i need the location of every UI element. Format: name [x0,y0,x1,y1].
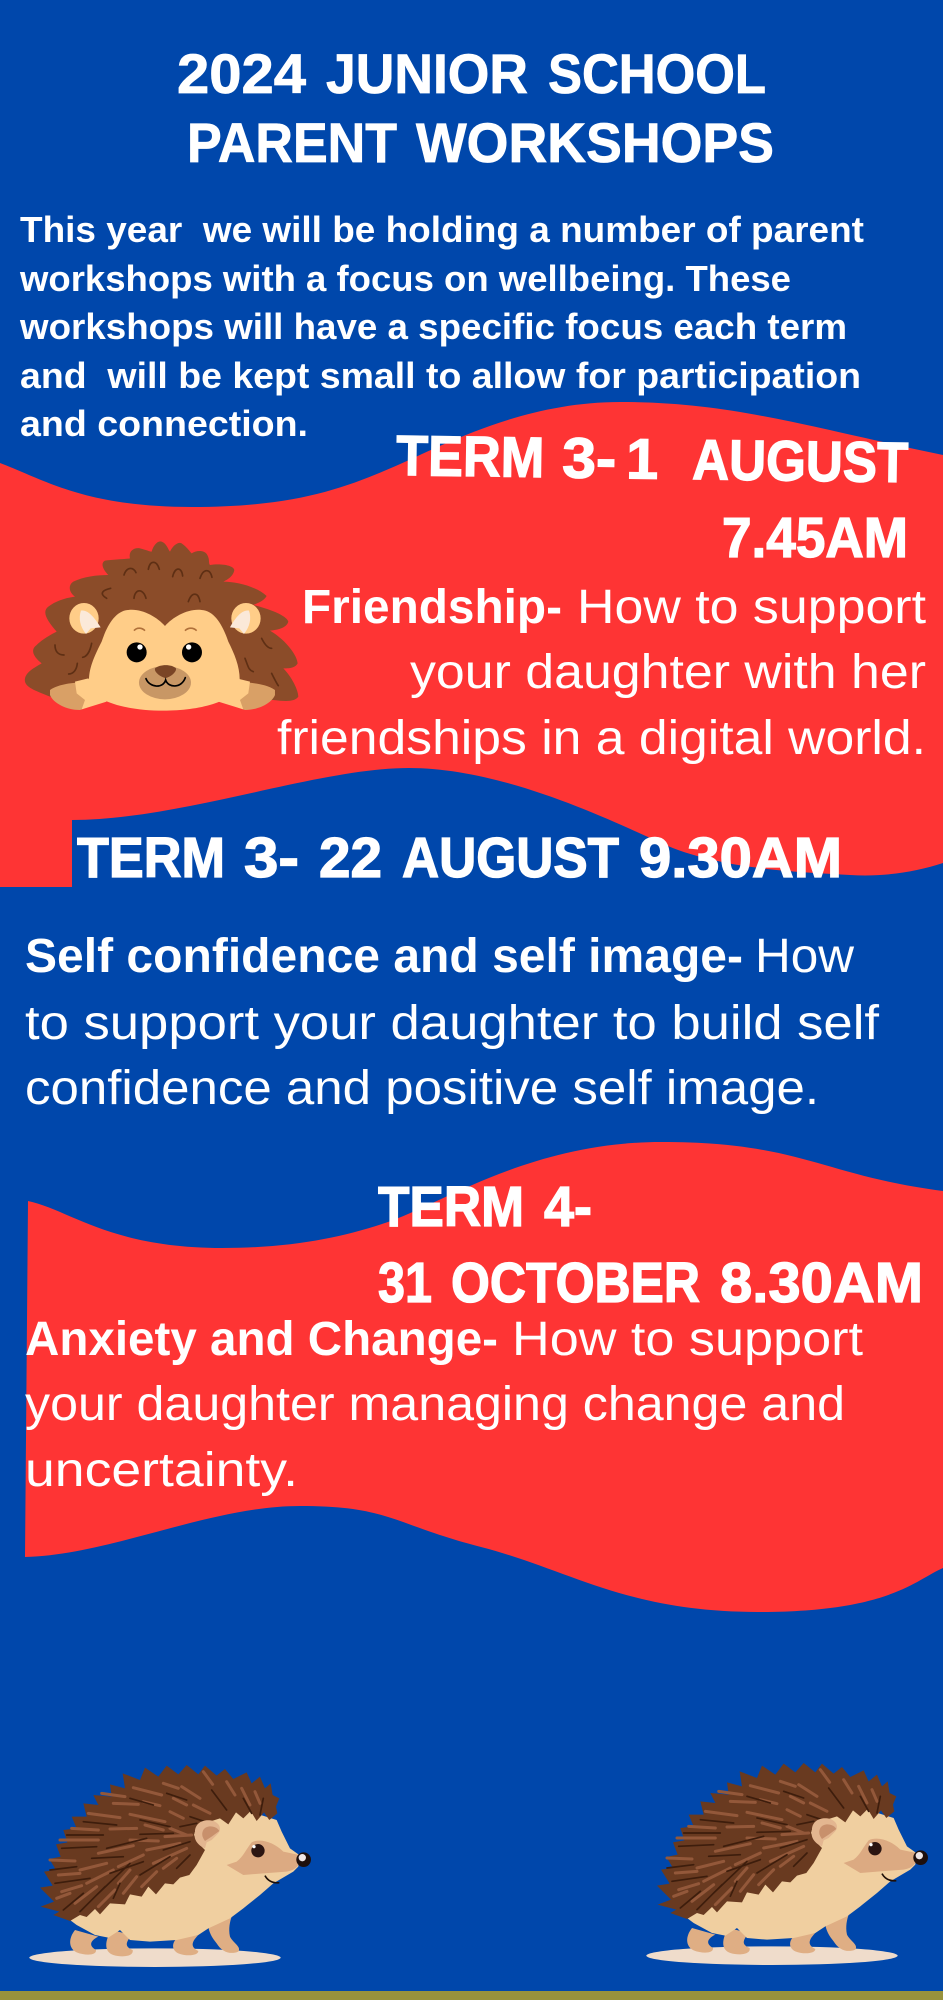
text: friendship workshop [277,581,926,765]
text: self confidence workshop: How [755,930,854,983]
heading: term 4, 31 October: 4- [544,1175,592,1239]
intro paragraph: This year we will be holding a number of parent [20,209,864,250]
heading: term 3, 22 August: 3- [244,826,299,890]
text: friendship workshop: Friendship- [302,581,562,634]
intro paragraph [19,209,864,444]
icon: cute hedgehog face [25,541,298,711]
title: WORKSHOPS [416,111,774,174]
heading: term 3, 22 August [77,826,842,890]
text: self confidence workshop: Self confidence and self image- [25,930,743,983]
text: anxiety workshop [25,1313,863,1497]
title: JUNIOR [326,42,528,105]
text: self confidence workshop [25,930,880,1115]
text: anxiety workshop: How to support [512,1313,863,1366]
icon: standing hedgehog right [646,1763,928,1965]
bottom strip [0,1991,943,2000]
text: anxiety workshop: Anxiety and Change- [25,1313,498,1366]
heading: term 3, 1 August: AUGUST [692,428,909,495]
heading: term 3, 1 August: 3- [562,426,617,491]
paws [50,678,275,710]
heading: term 3, 1 August: TERM [396,424,545,490]
text: friendship workshop: How to support [577,581,926,634]
text: self confidence workshop: confidence and positive self image. [25,1062,819,1115]
ears [69,603,261,634]
heading: term 4, 31 October: OCTOBER [451,1251,700,1315]
heading: term 3, 22 August: 22 [319,826,382,890]
title [177,42,774,174]
text: self confidence workshop: to support your daughter to build self [25,997,880,1050]
intro paragraph: and will be kept small to allow for participation [20,355,861,396]
title: SCHOOL [548,42,766,105]
panel: term 3 friendship wave [0,402,943,887]
ear [195,1820,220,1848]
heading: term 4, 31 October [378,1175,923,1315]
panel: term 4 anxiety wave [25,1142,943,1612]
title: 2024 [177,42,306,105]
face patch [227,1841,300,1875]
intro paragraph: workshops will have a specific focus each term [19,306,847,347]
heading: term 4, 31 October: 8.30AM [720,1251,923,1315]
text: anxiety workshop: uncertainty. [25,1444,298,1497]
heading: term 3, 1 August: 7.45AM [722,506,908,570]
heading: term 3, 22 August: 9.30AM [639,826,842,890]
face [89,610,240,711]
heading: term 3, 22 August: AUGUST [402,826,619,890]
heading: term 4, 31 October: TERM [378,1175,524,1239]
title: PARENT [187,111,397,174]
text: friendship workshop: your daughter with her [410,646,926,699]
heading: term 3, 1 August: 1 [626,427,659,492]
heading: term 4, 31 October: 31 [378,1251,432,1315]
heading: term 3, 1 August [396,424,909,570]
heading: term 3, 22 August: TERM [77,826,225,890]
intro paragraph: workshops with a focus on wellbeing. These [19,258,791,299]
icon: standing hedgehog left [29,1765,311,1967]
intro paragraph: and connection. [20,403,308,444]
text: friendship workshop: friendships in a digital world. [277,712,926,765]
text: anxiety workshop: your daughter managing change and [25,1378,845,1431]
